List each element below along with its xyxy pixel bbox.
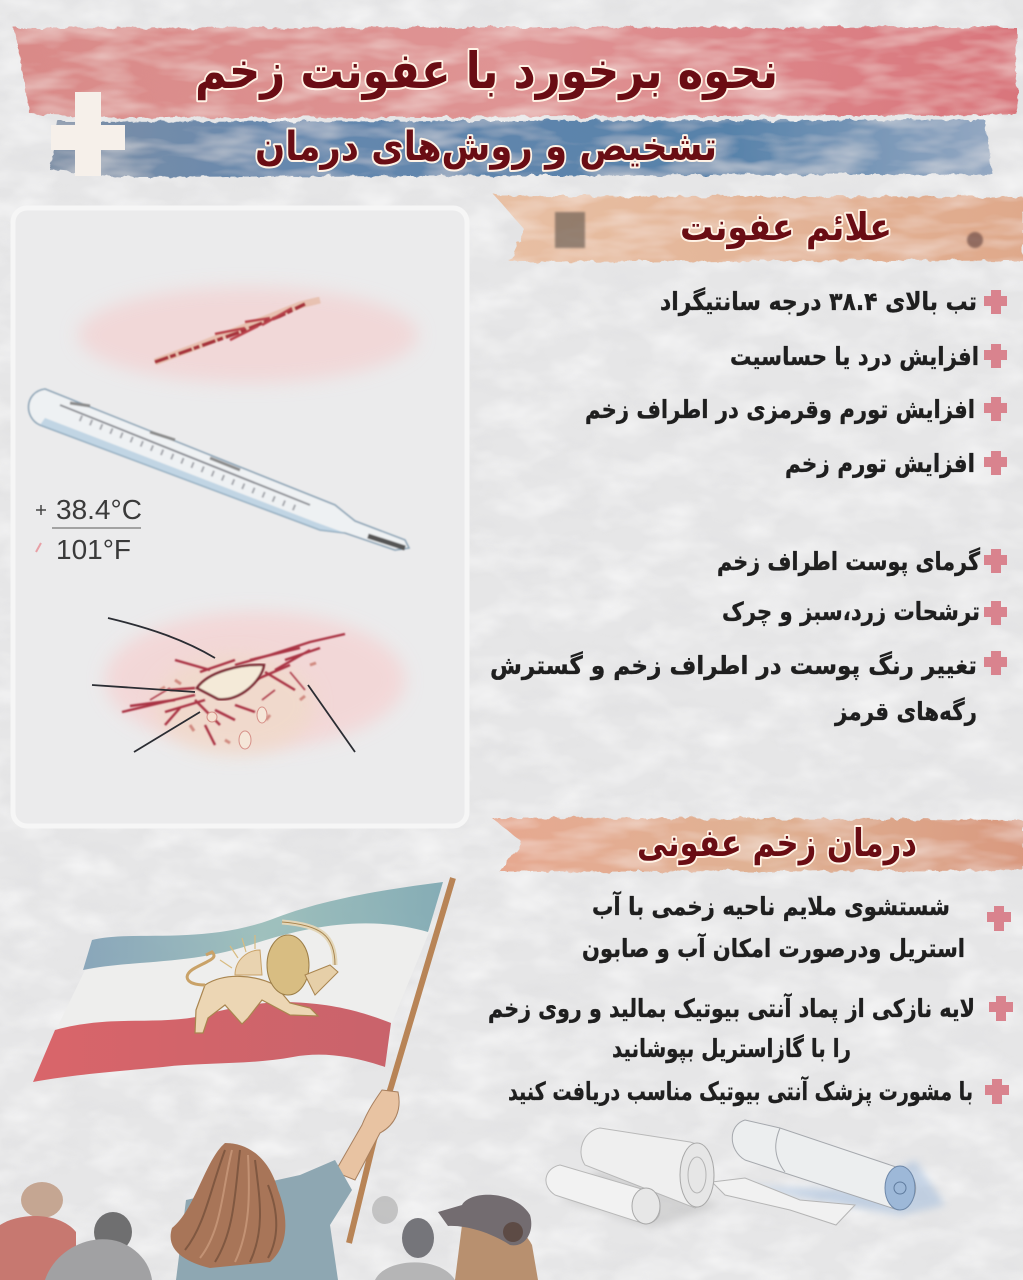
- title: نحوه برخورد با عفونت زخم: [195, 42, 778, 101]
- illustration: early wound: [78, 287, 418, 383]
- icon: white cross: [51, 92, 125, 176]
- item 7: [490, 651, 1007, 727]
- subtitle: تشخیص و روش‌های درمان: [255, 124, 717, 170]
- heading: treatment: درمان زخم عفونی: [637, 821, 917, 866]
- item 2: افزایش درد یا حساسیت: [730, 342, 979, 372]
- panel: header banners: [14, 27, 1018, 177]
- person with cap: [438, 1195, 538, 1280]
- illustration: infected wound: [92, 612, 405, 755]
- list: treatment steps: [488, 891, 1013, 1107]
- flag white field: [55, 923, 430, 1032]
- step 1: شستشوی ملایم ناحیه زخمی با آب: [592, 891, 950, 922]
- raised arm: [335, 1090, 399, 1180]
- banner: signs of infection: [495, 196, 1023, 262]
- banner: wound treatment: [492, 818, 1023, 872]
- item 7: تغییر رنگ پوست در اطراف زخم و گسترش: [490, 651, 977, 681]
- crowd small figures: [372, 1196, 455, 1280]
- large roll: [581, 1128, 714, 1208]
- woman shirt: [176, 1160, 352, 1280]
- blue shaded roll: [732, 1120, 916, 1210]
- illustration: thermometer: [29, 389, 409, 550]
- bandage strip: [712, 1178, 855, 1225]
- small roll: [546, 1165, 660, 1224]
- banner: red title strip: [14, 27, 1018, 118]
- card background: [13, 208, 467, 826]
- item 1: تب بالای ۳۸.۴ درجه سانتیگراد: [660, 287, 977, 317]
- flag green stripe: [83, 882, 443, 970]
- crowd person left: [0, 1182, 76, 1280]
- illustration: flag and protesters: [0, 878, 538, 1280]
- flag pole: [349, 878, 453, 1243]
- step 1: [582, 891, 1011, 964]
- step 2: را با گازاستریل بپوشانید: [612, 1034, 851, 1064]
- illustration: bandage rolls: [546, 1120, 945, 1228]
- heading: signs: علائم عفونت: [680, 205, 892, 250]
- banner: blue subtitle strip: [50, 120, 992, 177]
- crowd person grey hoodie: [45, 1212, 152, 1280]
- step 2: [488, 993, 1013, 1064]
- panel: wound illustrations: [13, 208, 467, 826]
- flag red stripe: [33, 1002, 391, 1082]
- item 6: ترشحات زرد،سبز و چرک: [722, 597, 980, 627]
- item 7: رگه‌های قرمز: [833, 697, 977, 727]
- lion and sun emblem: [187, 922, 338, 1033]
- woman hair: [171, 1143, 285, 1268]
- temperature readout: [36, 494, 142, 565]
- temperature readout: 38.4°C: [56, 494, 142, 525]
- list: infection signs: [490, 287, 1007, 727]
- item 4: افزایش تورم زخم: [785, 449, 975, 479]
- temperature readout: 101°F: [56, 534, 131, 565]
